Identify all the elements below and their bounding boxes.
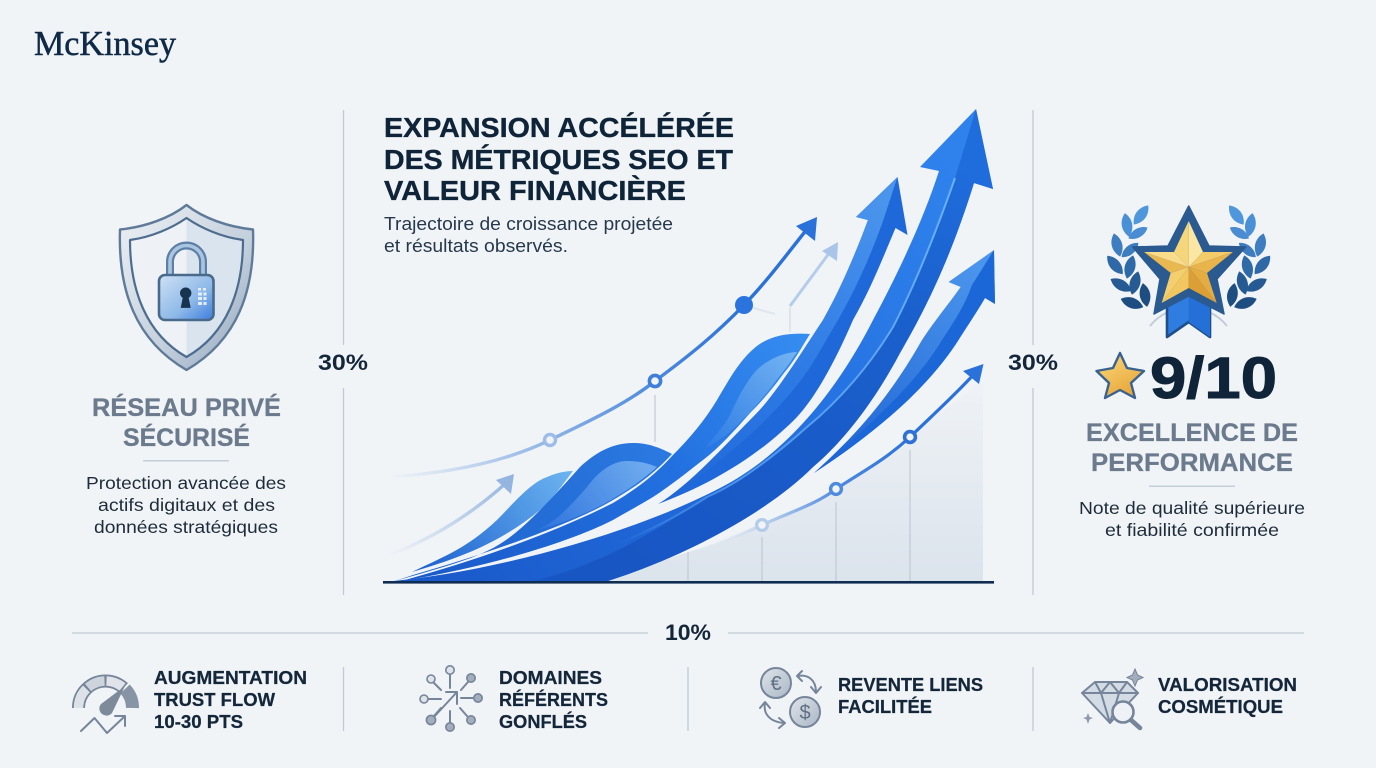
text: performance description: Note de qualité supérieure bbox=[1079, 498, 1305, 518]
subtitle bbox=[384, 213, 673, 256]
title: VALEUR FINANCIÈRE bbox=[384, 175, 686, 206]
label: cosmetic valuation bbox=[1158, 674, 1297, 717]
panel: cosmetic valuation bbox=[1082, 669, 1297, 728]
heading: performance excellence bbox=[1086, 419, 1298, 477]
label: trust flow: TRUST FLOW bbox=[154, 689, 276, 710]
label: left share 30%: 30% bbox=[318, 350, 368, 375]
metric: 9/10 rating with star bbox=[1096, 346, 1277, 411]
text: secure network description: données stratégiques bbox=[94, 517, 278, 537]
label: trust flow: AUGMENTATION bbox=[154, 667, 307, 688]
text: secure network description bbox=[86, 473, 286, 537]
logo: McKinsey: McKinsey bbox=[34, 25, 177, 63]
ribbon: large hump band bbox=[405, 334, 810, 580]
metric: 9/10 rating with star: 9/10 bbox=[1150, 346, 1277, 411]
icon: gauge with trend line bbox=[78, 681, 133, 733]
icon: currency exchange: € bbox=[770, 673, 782, 695]
text: secure network description: Protection avancée des bbox=[86, 473, 286, 493]
line: upper trajectory with arrow bbox=[388, 217, 817, 477]
title bbox=[384, 112, 734, 206]
arrow: right rising ribbon bbox=[814, 250, 995, 473]
ribbon: light hump bbox=[412, 471, 573, 572]
icon: currency exchange: $ bbox=[799, 702, 811, 724]
label: cosmetic valuation: VALORISATION bbox=[1158, 674, 1297, 695]
label: cosmetic valuation: COSMÉTIQUE bbox=[1158, 696, 1283, 717]
text: performance description: et fiabilité confirmée bbox=[1105, 520, 1279, 540]
label: right share 30%: 30% bbox=[1008, 350, 1058, 375]
arrow: pale lower left arrow bbox=[388, 474, 514, 555]
label: link resale bbox=[838, 674, 983, 717]
panel: performance excellence bbox=[1079, 202, 1305, 540]
label: trust flow: 10-30 PTS bbox=[154, 711, 243, 732]
chart: growth arrows bbox=[383, 109, 995, 584]
label: referring domains: DOMAINES bbox=[499, 667, 602, 688]
text: performance description bbox=[1079, 498, 1305, 540]
subtitle: et résultats observés. bbox=[384, 235, 568, 256]
label: referring domains bbox=[499, 667, 608, 732]
text: secure network description: actifs digitaux et des bbox=[98, 495, 275, 515]
area under the lower curve bbox=[600, 306, 983, 582]
panel: secure private network bbox=[86, 205, 286, 537]
heading: secure network: RÉSEAU PRIVÉ bbox=[92, 393, 281, 422]
heading: performance excellence: EXCELLENCE DE bbox=[1086, 419, 1298, 447]
panel: trust flow bbox=[78, 667, 307, 733]
icon: shield with padlock bbox=[120, 205, 253, 370]
icon: diamond with magnifier bbox=[1082, 669, 1143, 728]
subtitle: Trajectoire de croissance projetée bbox=[384, 213, 673, 234]
arrow: main rising ribbon bbox=[383, 109, 993, 582]
icon: star medal with laurels bbox=[1103, 202, 1274, 337]
heading: secure network: SÉCURISÉ bbox=[123, 423, 250, 452]
label: bottom share 10%: 10% bbox=[665, 620, 711, 645]
heading: secure network bbox=[92, 393, 281, 452]
axis baseline bbox=[383, 581, 994, 584]
label: referring domains: RÉFÉRENTS bbox=[499, 689, 608, 710]
label: link resale: FACILITÉE bbox=[838, 696, 932, 717]
panel: link resale bbox=[760, 668, 983, 728]
label: link resale: REVENTE LIENS bbox=[838, 674, 983, 695]
line: lower trajectory with arrow bbox=[706, 364, 984, 545]
arrow: pale upper arrow bbox=[790, 242, 838, 306]
arrow: second rising ribbon bbox=[658, 177, 908, 504]
label: referring domains: GONFLÉS bbox=[499, 711, 587, 732]
icon: currency exchange bbox=[760, 668, 821, 728]
title: EXPANSION ACCÉLÉRÉE bbox=[384, 112, 734, 143]
label: trust flow bbox=[154, 667, 307, 732]
icon: link network bbox=[420, 666, 482, 731]
title: DES MÉTRIQUES SEO ET bbox=[384, 144, 733, 175]
ribbon: second hump bbox=[395, 443, 672, 581]
panel: referring domains bbox=[420, 666, 608, 732]
heading: performance excellence: PERFORMANCE bbox=[1091, 449, 1293, 477]
